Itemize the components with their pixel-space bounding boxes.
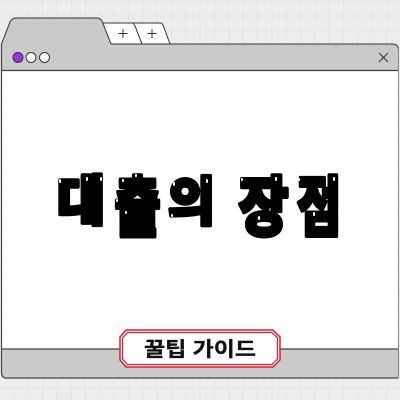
icon: purple dot bbox=[13, 52, 23, 62]
icon: plus bbox=[148, 29, 156, 38]
back tabs bbox=[102, 23, 170, 44]
title: 의 bbox=[168, 172, 215, 231]
title highlights bbox=[59, 174, 335, 220]
window toolbar bbox=[2, 18, 398, 71]
window footer bar bbox=[2, 349, 398, 378]
title bbox=[57, 171, 341, 245]
window content area bbox=[2, 70, 398, 348]
title: 장 bbox=[239, 171, 288, 244]
badge: tip guide bbox=[120, 330, 280, 367]
icon: white dot bbox=[26, 52, 36, 62]
icon: white dot bbox=[40, 52, 50, 62]
icon: plus bbox=[118, 29, 128, 38]
title: 점 bbox=[297, 172, 341, 245]
title: 대 bbox=[57, 172, 105, 232]
title: 출 bbox=[114, 173, 161, 245]
badge label: 꿀팁 가이드 bbox=[144, 338, 256, 361]
icon: close bbox=[379, 53, 388, 62]
